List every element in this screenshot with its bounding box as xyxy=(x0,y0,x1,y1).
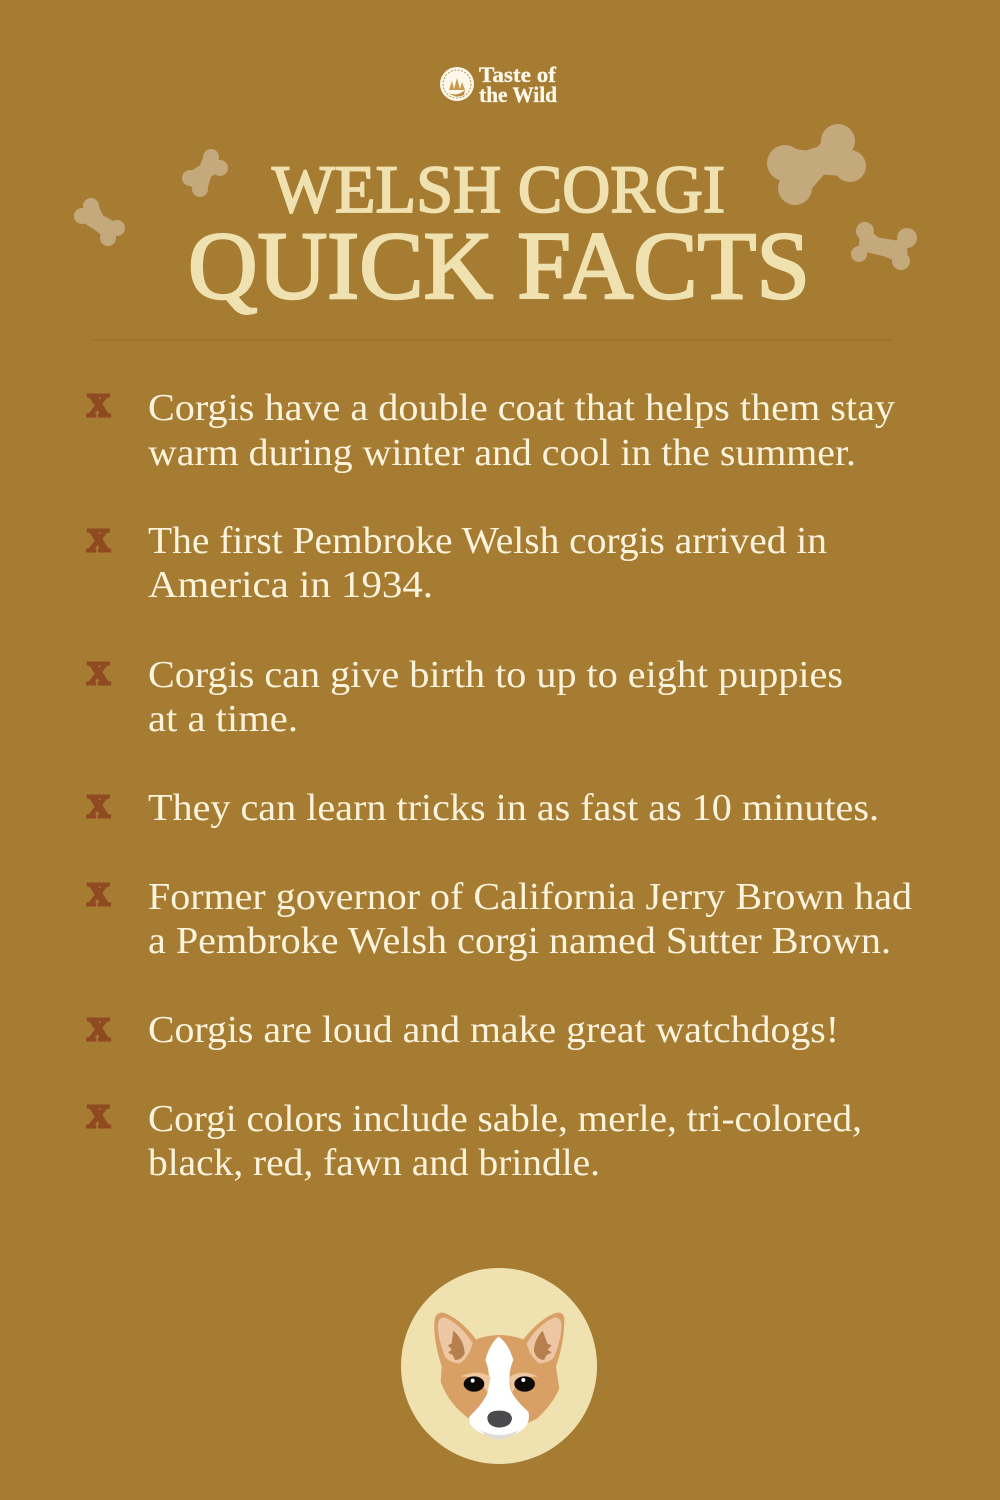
title: WELSH CORGI xyxy=(272,151,725,227)
icon: corgi face in circle xyxy=(401,1268,597,1464)
fact 3: Corgis can give birth to up to eight puppies xyxy=(148,654,843,696)
fact 2 xyxy=(87,520,827,606)
fact 1: Corgis have a double coat that helps them stay xyxy=(148,387,895,429)
fact 1 xyxy=(87,387,895,474)
fact 7: X xyxy=(87,1098,110,1134)
fact 7 xyxy=(87,1098,862,1184)
icon: small bone top xyxy=(182,149,228,197)
logo: Taste of the Wild xyxy=(440,62,557,107)
corgi head xyxy=(434,1313,564,1437)
logo: Taste of the Wild: the Wild xyxy=(479,82,557,107)
fact 7: black, red, fawn and brindle. xyxy=(148,1142,600,1184)
fact 2: The first Pembroke Welsh corgis arrived in xyxy=(148,520,827,562)
fact 6: X xyxy=(87,1011,110,1047)
icon: large bone top right xyxy=(767,124,866,205)
title xyxy=(188,151,810,319)
fact 6: Corgis are loud and make great watchdogs! xyxy=(148,1009,839,1051)
fact 3: X xyxy=(87,655,110,691)
fact 7: Corgi colors include sable, merle, tri-colored, xyxy=(148,1098,862,1140)
fact 1: warm during winter and cool in the summer. xyxy=(148,432,856,474)
fact 2: X xyxy=(87,522,110,558)
fact 4: They can learn tricks in as fast as 10 minutes. xyxy=(148,787,879,829)
fact 2: America in 1934. xyxy=(148,564,433,606)
fact 5: Former governor of California Jerry Brown had xyxy=(148,876,912,918)
icon: bone right xyxy=(851,222,917,270)
icon: small bone left xyxy=(74,198,125,246)
fact 3 xyxy=(87,654,843,740)
fact 5: X xyxy=(87,876,110,912)
logo: Taste of the Wild: Taste of xyxy=(479,62,557,87)
fact 3: at a time. xyxy=(148,698,298,740)
fact 1: X xyxy=(87,387,110,423)
title: QUICK FACTS xyxy=(188,212,810,319)
fact 4: X xyxy=(87,788,110,824)
fact 5 xyxy=(87,876,912,962)
fact 5: a Pembroke Welsh corgi named Sutter Brown. xyxy=(148,920,891,962)
